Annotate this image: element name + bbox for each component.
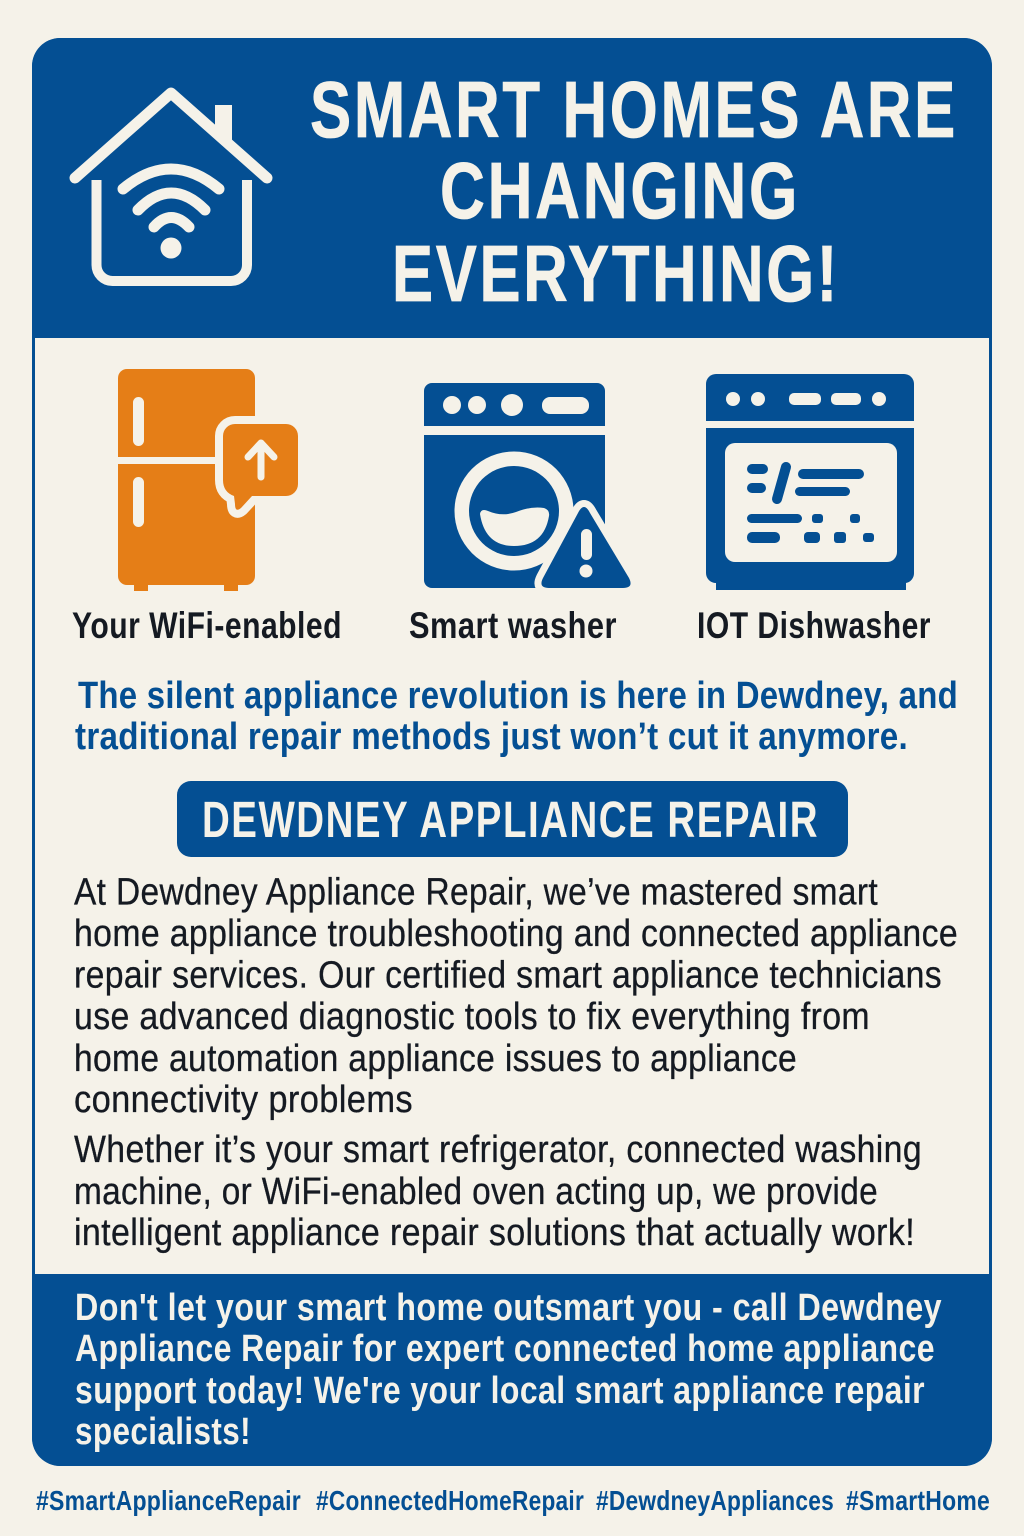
icon: smart home with wifi [75, 93, 267, 281]
hashtags: #ConnectedHomeRepair [316, 1485, 584, 1516]
text block: services paragraph: connectivity problems [74, 1079, 413, 1121]
title [310, 65, 958, 318]
hashtags: #SmartApplianceRepair [36, 1485, 301, 1516]
subheading: revolution statement [75, 675, 958, 758]
subheading: revolution statement: traditional repair methods just won’t cut it anymore. [75, 716, 908, 758]
icon: connected dishwasher with code display [706, 374, 914, 590]
hashtags: #DewdneyAppliances [596, 1485, 834, 1516]
text block: services paragraph: At Dewdney Appliance Repair, we’ve mastered smart [74, 872, 878, 914]
hashtags [36, 1485, 990, 1516]
panel: header band [32, 38, 992, 338]
hashtags: #SmartHome [846, 1485, 990, 1516]
banner: company name [177, 781, 848, 857]
icon: orange smart fridge with message [118, 369, 298, 591]
text block: services paragraph: repair services. Our certified smart appliance technicians [74, 954, 942, 996]
call to action [75, 1287, 942, 1453]
title: EVERYTHING! [392, 229, 840, 318]
text block: services paragraph [74, 872, 958, 1121]
icon: smart washer with warning [424, 383, 631, 588]
title: CHANGING [440, 146, 800, 235]
text block: repair solutions paragraph: Whether it’s your smart refrigerator, connected washing [74, 1129, 922, 1171]
label: dishwasher: IOT Dishwasher [697, 605, 931, 646]
text block: services paragraph: home automation appliance issues to appliance [74, 1038, 797, 1080]
panel: footer band [32, 1274, 992, 1466]
call to action: specialists! [75, 1411, 251, 1453]
banner: company name: DEWDNEY APPLIANCE REPAIR [202, 791, 819, 848]
text block: repair solutions paragraph [74, 1129, 922, 1254]
text block: services paragraph: use advanced diagnostic tools to fix everything from [74, 996, 870, 1038]
text block: repair solutions paragraph: intelligent appliance repair solutions that actually work! [74, 1212, 915, 1254]
label: fridge: Your WiFi-enabled [72, 605, 342, 646]
text block: repair solutions paragraph: machine, or WiFi-enabled oven acting up, we provide [74, 1171, 878, 1213]
label: washer: Smart washer [409, 605, 617, 646]
